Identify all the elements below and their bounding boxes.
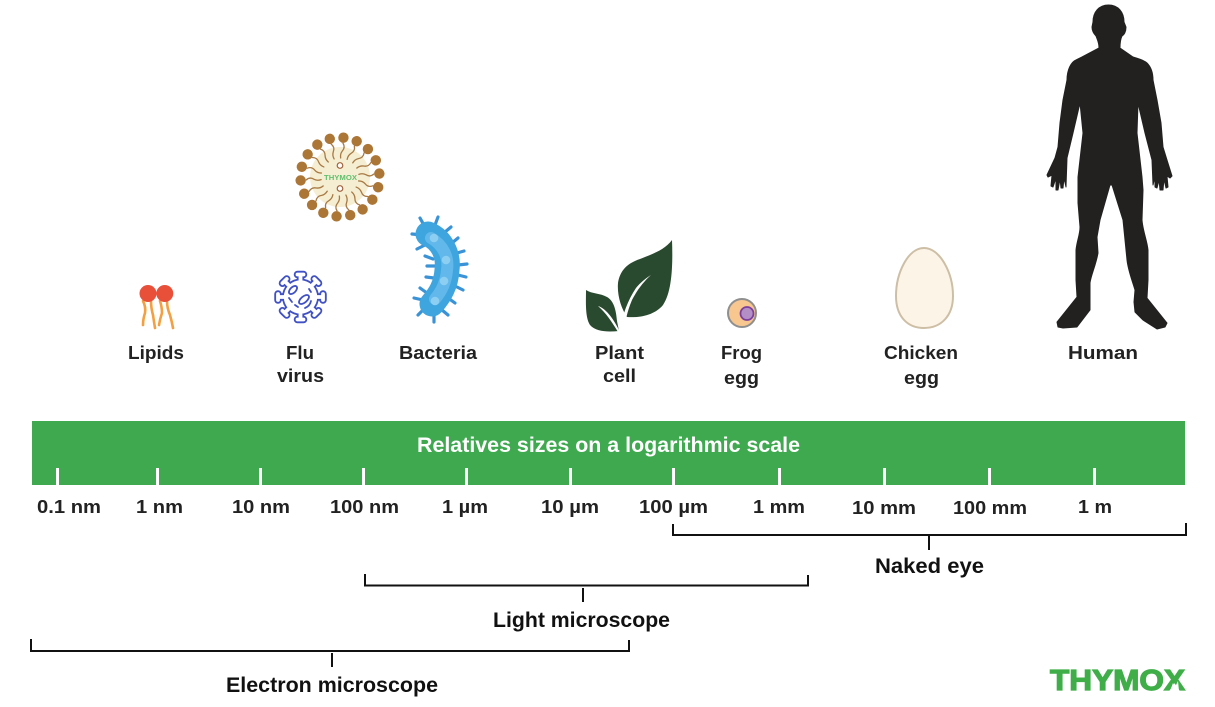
logo: THYMOX: THYMOX bbox=[1050, 665, 1186, 697]
icon: flu virus bbox=[278, 274, 323, 320]
icon: lipids bbox=[140, 285, 173, 328]
label: Human: Human bbox=[1068, 342, 1138, 363]
bracket: naked eye: Naked eye bbox=[875, 555, 984, 578]
label: Bacteria: Bacteria bbox=[399, 342, 478, 363]
scale tick labels: 1 µm bbox=[442, 496, 488, 517]
label: Frog egg bbox=[721, 342, 762, 388]
icon: plant leaves bbox=[586, 240, 672, 332]
icon: liposome with logo bbox=[295, 132, 385, 222]
label: Plant cell: cell bbox=[603, 365, 636, 386]
label: Lipids: Lipids bbox=[128, 342, 184, 363]
scale tick labels: 100 mm bbox=[953, 497, 1027, 518]
bracket: light microscope: Light microscope bbox=[493, 609, 670, 632]
icon: chicken egg bbox=[896, 248, 953, 328]
label: Chicken egg: Chicken bbox=[884, 342, 958, 363]
scale tick labels: 1 nm bbox=[136, 496, 183, 517]
bracket: light microscope bbox=[365, 574, 808, 632]
scale tick labels: 10 µm bbox=[541, 496, 599, 517]
bracket: electron microscope: Electron microscope bbox=[226, 674, 438, 697]
icon: bacteria bbox=[412, 217, 467, 322]
label: Plant cell: Plant bbox=[595, 342, 644, 363]
icon: human silhouette bbox=[1047, 5, 1172, 329]
label: Chicken egg bbox=[884, 342, 958, 388]
scale tick labels: 10 nm bbox=[232, 496, 290, 517]
scale tick labels: 1 mm bbox=[753, 496, 805, 517]
label: Frog egg: Frog bbox=[721, 342, 762, 363]
label: Flu virus: virus bbox=[277, 365, 324, 386]
scale tick labels: 100 µm bbox=[639, 496, 708, 517]
scale tick labels: 100 nm bbox=[330, 496, 399, 517]
scale bar bbox=[32, 421, 1185, 485]
label: Flu virus: Flu bbox=[286, 342, 314, 363]
label: Frog egg: egg bbox=[724, 367, 759, 388]
scale tick labels: 10 mm bbox=[852, 497, 916, 518]
bracket: electron microscope bbox=[31, 639, 629, 697]
scale tick labels: 0.1 nm bbox=[37, 496, 101, 517]
icon: liposome with logo: THYMOX bbox=[324, 175, 357, 182]
heading: scale title: Relatives sizes on a logarithmic scale bbox=[417, 434, 800, 457]
label: Flu virus bbox=[277, 342, 324, 386]
scale tick labels: 1 m bbox=[1078, 496, 1112, 517]
label: Chicken egg: egg bbox=[904, 367, 939, 388]
label: Plant cell bbox=[595, 342, 644, 386]
icon: frog egg bbox=[728, 299, 756, 327]
scale tick labels bbox=[37, 496, 1112, 518]
bracket: naked eye bbox=[673, 523, 1186, 578]
